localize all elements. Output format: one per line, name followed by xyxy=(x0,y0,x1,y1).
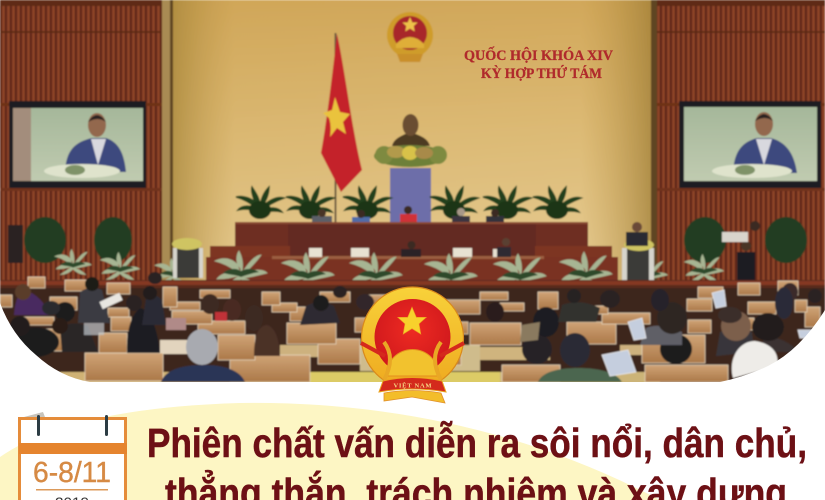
calendar ring right xyxy=(105,415,108,436)
emblem outer gold ring xyxy=(362,287,464,389)
presiding officials xyxy=(312,206,504,225)
calendar divider xyxy=(36,489,108,490)
emblem rice sheaves xyxy=(361,342,464,380)
rostrum xyxy=(390,168,431,222)
photo: National Assembly hall xyxy=(0,0,825,388)
emblem star xyxy=(398,307,426,334)
wall emblem xyxy=(387,12,433,62)
dais tiers xyxy=(206,222,618,285)
wall text: QUỐC HỘI KHÓA XIV xyxy=(464,46,613,64)
calendar sheet shadow xyxy=(24,412,45,417)
national emblem xyxy=(361,287,464,403)
hall rail xyxy=(0,280,825,292)
right potted plants xyxy=(155,217,807,286)
left screen xyxy=(9,101,146,188)
audience floor xyxy=(0,288,825,388)
emblem red disc xyxy=(374,299,450,375)
wall text: KỲ HỢP THỨ TÁM xyxy=(481,65,602,82)
headline xyxy=(147,420,807,500)
flower stand left xyxy=(172,238,203,278)
monitors xyxy=(0,277,820,382)
delegates right xyxy=(486,283,822,382)
right wood panelling xyxy=(651,0,825,290)
calendar frame xyxy=(20,418,126,500)
flag xyxy=(321,33,362,223)
low plants xyxy=(214,250,614,282)
wall text xyxy=(464,46,613,82)
calendar band xyxy=(19,443,127,454)
emblem banner base xyxy=(384,390,445,403)
laptops xyxy=(602,290,812,376)
staff standing right xyxy=(626,221,760,284)
flower stand right xyxy=(622,239,654,280)
left wood panelling xyxy=(0,0,173,290)
emblem banner xyxy=(379,378,446,392)
calendar xyxy=(19,412,127,500)
delegates left xyxy=(10,272,395,382)
desks xyxy=(60,338,660,382)
flower arrangement xyxy=(374,145,447,167)
second tier officials xyxy=(401,238,511,257)
left potted plants xyxy=(24,217,140,280)
central wall xyxy=(165,0,660,300)
emblem gear xyxy=(386,350,439,376)
emblem text: VIỆT NAM xyxy=(394,382,432,390)
bust xyxy=(392,114,430,146)
pale yellow background arc xyxy=(0,403,660,500)
palms on dais xyxy=(236,187,581,219)
right screen xyxy=(679,101,821,188)
delegates' white chairs at second tier xyxy=(309,248,499,257)
calendar ring left xyxy=(37,415,40,436)
calendar date: 6-8/11 xyxy=(33,457,111,489)
left speaker xyxy=(8,225,23,263)
